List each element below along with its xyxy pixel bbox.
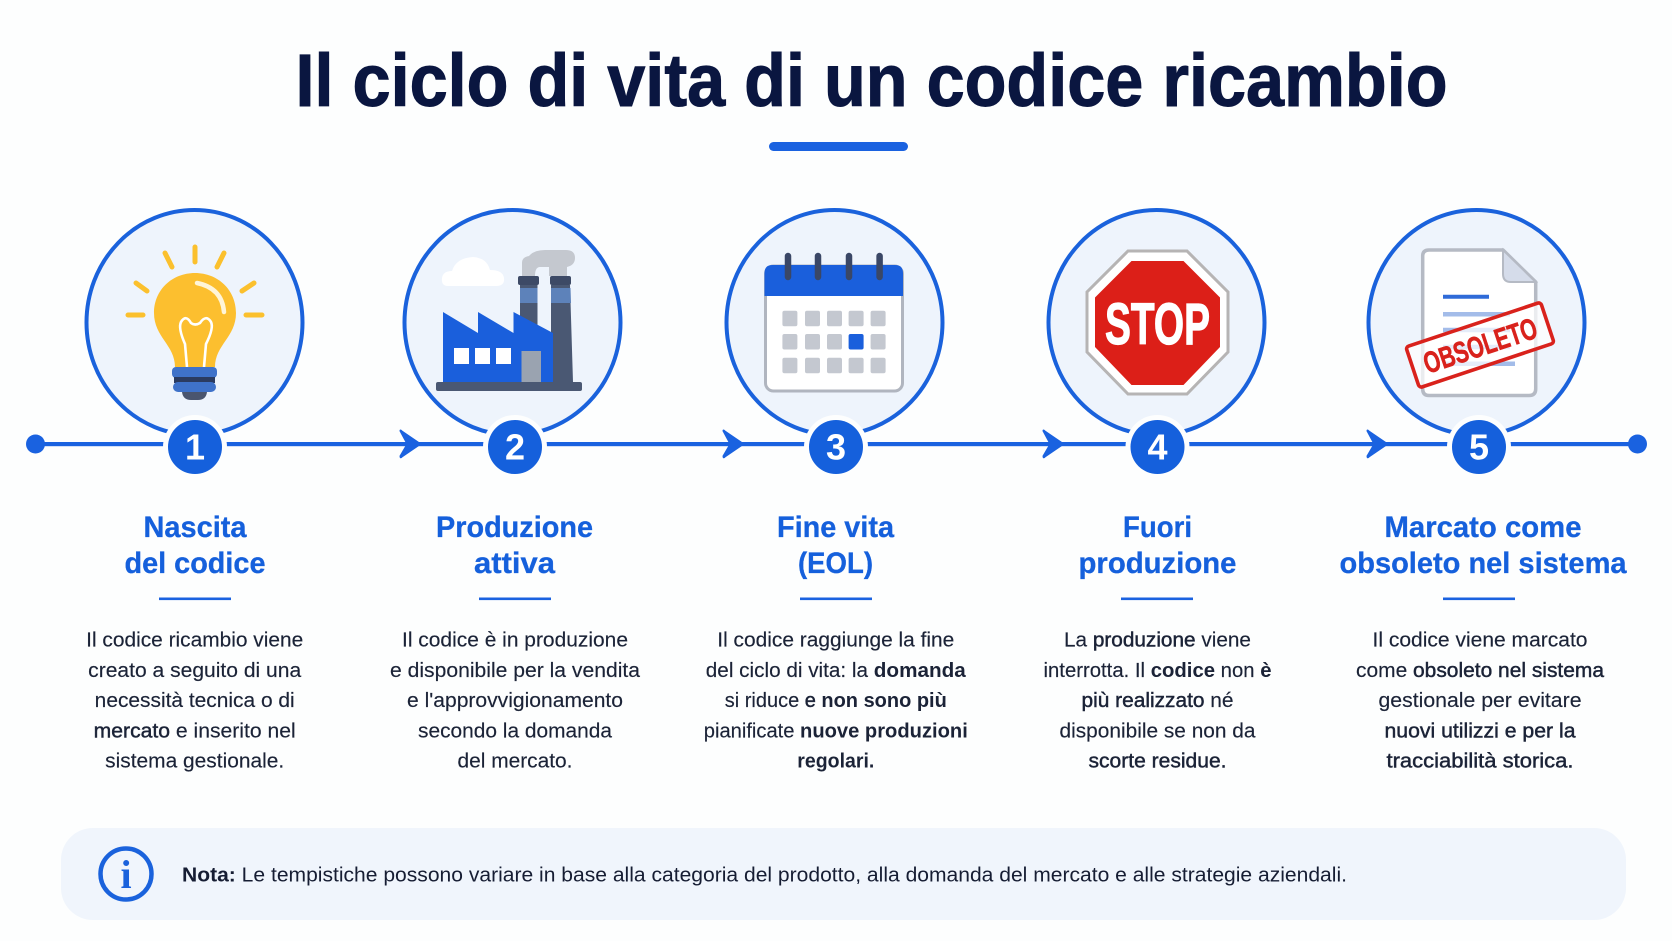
- heading step 1: Nascita: [144, 511, 247, 544]
- number badge 2: [483, 415, 547, 479]
- text step 5: tracciabilità storica.: [1386, 750, 1574, 772]
- text step 4: scorte residue.: [1088, 750, 1226, 772]
- icon: info: [100, 848, 152, 900]
- number badge 1: 1: [185, 426, 205, 468]
- cloud: [442, 257, 504, 286]
- text step 2: secondo la domanda: [418, 720, 613, 742]
- text step 5: [1356, 628, 1605, 772]
- heading divider 5: [1443, 598, 1515, 600]
- text step 1: sistema gestionale.: [105, 750, 284, 772]
- number badge 5: [1447, 415, 1511, 479]
- icon: light bulb: [128, 247, 262, 400]
- note panel: [61, 828, 1626, 920]
- heading divider 2: [479, 598, 551, 600]
- text step 5: nuovi utilizzi e per la: [1384, 720, 1576, 742]
- arrow 2: [723, 430, 744, 458]
- arrow 1: [400, 430, 421, 458]
- text step 5: come obsoleto nel sistema: [1356, 659, 1605, 682]
- heading step 1: del codice: [124, 547, 266, 580]
- heading step 4: [1078, 511, 1236, 580]
- circle step 4: [1048, 210, 1264, 435]
- text step 3: del ciclo di vita: la domanda: [706, 659, 966, 682]
- text step 4: disponibile se non da: [1060, 720, 1256, 742]
- heading step 3: Fine vita: [777, 511, 894, 544]
- icon: obsolete document: OBSOLETO: [1419, 312, 1542, 381]
- number badge 4: 4: [1147, 426, 1168, 468]
- note text: Nota: Le tempistiche possono variare in base alla categoria del prodotto, alla domanda del mercato e alle strategie aziendali.: [182, 864, 1347, 886]
- title underline: [769, 142, 908, 151]
- heading step 5: Marcato come: [1384, 511, 1582, 544]
- arrow 3: [1043, 430, 1064, 458]
- text step 1: mercato e inserito nel: [94, 720, 296, 742]
- text step 3: si riduce e non sono più: [725, 689, 947, 712]
- icon: info: i: [120, 852, 132, 897]
- heading divider 4: [1121, 598, 1193, 600]
- heading step 4: Fuori: [1123, 511, 1192, 544]
- text step 2: e l'approvvigionamento: [407, 689, 623, 712]
- icon: obsolete document: [1406, 250, 1554, 396]
- heading step 4: produzione: [1078, 547, 1236, 580]
- heading step 2: attiva: [474, 547, 555, 580]
- heading divider 1: [159, 598, 231, 600]
- text step 3: regolari.: [797, 750, 874, 772]
- text step 3: pianificate nuove produzioni: [704, 720, 968, 742]
- number badge 3: [804, 415, 868, 479]
- heading step 3: [777, 511, 894, 580]
- number badge 1: [163, 415, 227, 479]
- text step 2: Il codice è in produzione: [402, 628, 628, 652]
- title: Il ciclo di vita di un codice ricambio: [296, 39, 1448, 122]
- icon: stop sign: [1087, 251, 1228, 394]
- text step 4: interrotta. Il codice non è: [1044, 659, 1271, 682]
- text step 2: [390, 628, 641, 772]
- text step 2: del mercato.: [458, 750, 572, 772]
- text step 1: necessità tecnica o di: [95, 689, 295, 712]
- heading step 3: (EOL): [798, 547, 873, 580]
- text step 1: [86, 628, 303, 772]
- heading step 2: [436, 511, 593, 580]
- text step 5: gestionale per evitare: [1378, 689, 1582, 712]
- circle step 2: [404, 210, 620, 435]
- icon: stop sign: STOP: [1105, 292, 1210, 357]
- smoke: [522, 250, 575, 276]
- icon: calendar: [764, 256, 903, 391]
- text step 2: e disponibile per la vendita: [390, 659, 641, 682]
- arrow 4: [1367, 430, 1388, 458]
- text step 4: [1044, 628, 1271, 772]
- building: [443, 312, 553, 382]
- text step 1: Il codice ricambio viene: [86, 628, 303, 652]
- heading divider 3: [800, 598, 872, 600]
- circle step 5: [1368, 210, 1584, 435]
- chimneys: [520, 285, 573, 382]
- text step 3: [704, 628, 968, 772]
- number badge 5: 5: [1469, 426, 1489, 468]
- circle step 3: [726, 210, 942, 435]
- number badge 2: 2: [505, 426, 525, 468]
- heading step 1: [124, 511, 266, 580]
- circle step 1: [86, 210, 302, 435]
- text step 3: Il codice raggiunge la fine: [717, 628, 954, 652]
- text step 4: La produzione viene: [1064, 628, 1251, 652]
- icon: factory: [436, 250, 582, 391]
- heading step 5: [1340, 511, 1627, 580]
- number badge 3: 3: [826, 426, 846, 468]
- heading step 5: obsoleto nel sistema: [1340, 547, 1627, 580]
- text step 1: creato a seguito di una: [88, 659, 302, 682]
- heading step 2: Produzione: [436, 511, 593, 544]
- text step 5: Il codice viene marcato: [1372, 628, 1588, 652]
- text step 4: più realizzato né: [1082, 689, 1234, 712]
- number badge 4: [1126, 415, 1190, 479]
- timeline: [26, 434, 1647, 454]
